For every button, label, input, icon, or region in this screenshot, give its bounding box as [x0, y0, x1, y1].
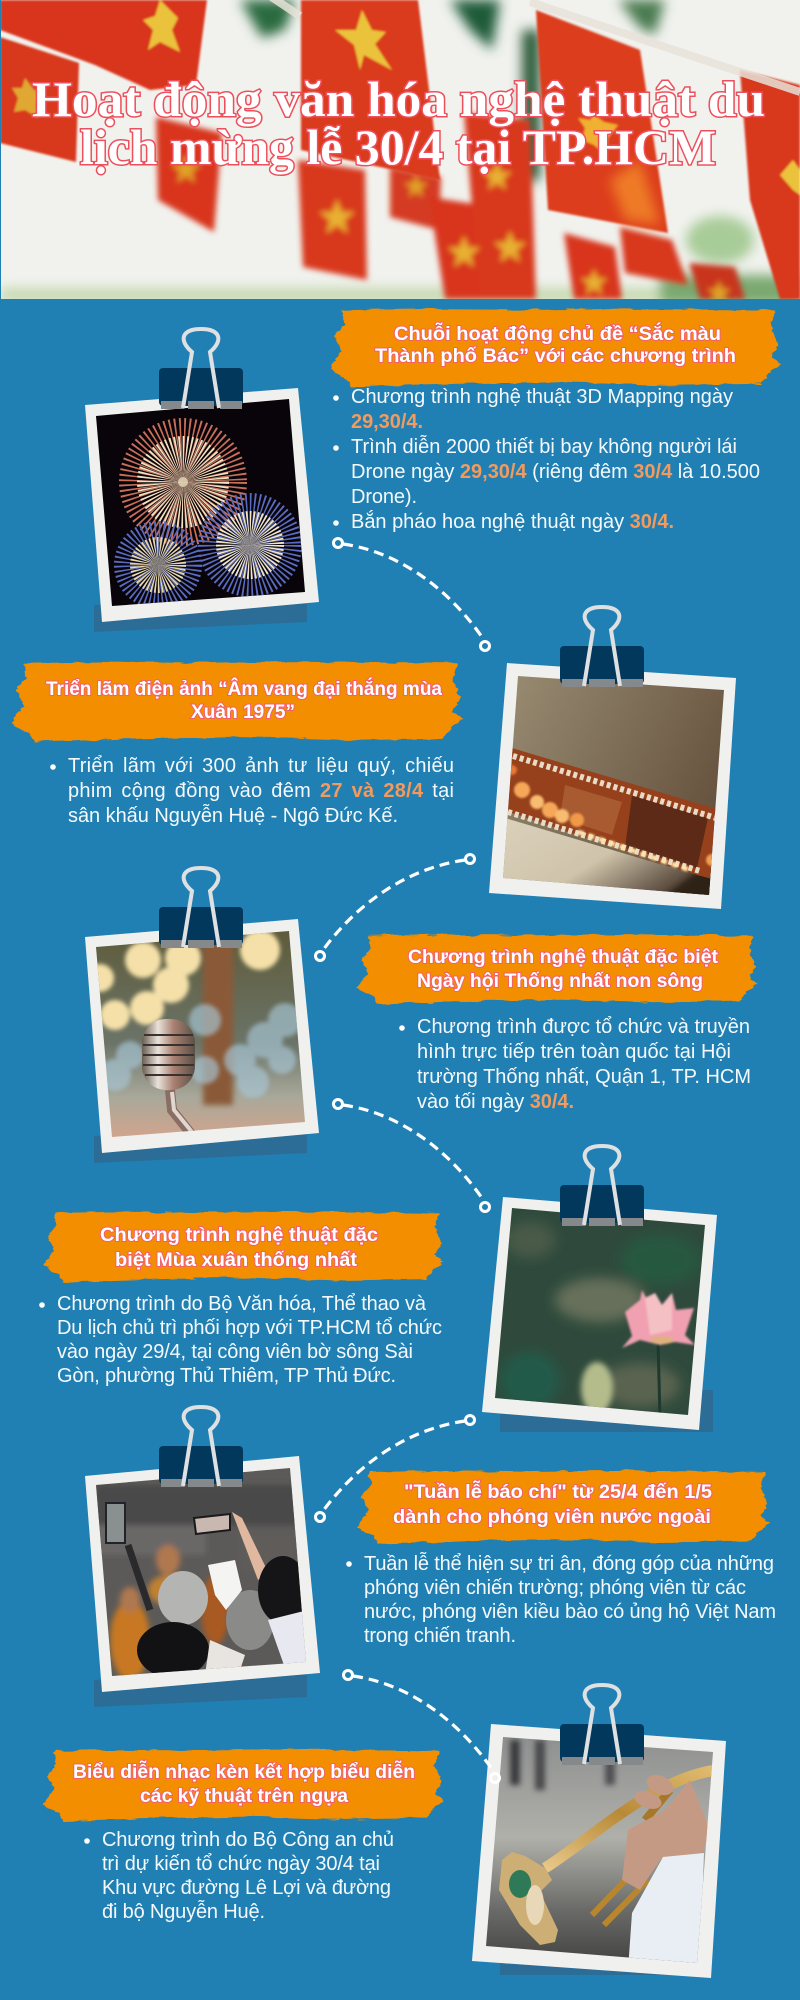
- section 3: Ngày hội Thống nhất non sông: [85, 868, 758, 1163]
- bullet text: vào ngày 29/4, tại công viên bờ sông Sài: [57, 1341, 413, 1363]
- bullet text: trường Thống nhất, Quận 1, TP. HCM: [417, 1066, 751, 1088]
- bullet text: vào tối ngày 30/4.: [417, 1091, 574, 1113]
- binder clip: [560, 1146, 644, 1226]
- dashed connector 5: [344, 1670, 500, 1782]
- banner heading: Ngày hội Thống nhất non sông: [417, 970, 703, 992]
- bullet list: [333, 386, 760, 533]
- dashed connector 4: [316, 1416, 474, 1522]
- bullet text: hình trực tiếp trên toàn quốc tại Hội: [417, 1041, 731, 1063]
- banner heading: [357, 1470, 770, 1544]
- banner heading: [43, 1211, 444, 1282]
- bullet list: Bắn pháo hoa nghệ thuật ngày 30/4.: [351, 510, 674, 533]
- polaroid photo: fireworks: [85, 388, 319, 632]
- banner heading: Triển lãm điện ảnh “Âm vang đại thắng mùa: [46, 676, 442, 700]
- banner heading: [43, 1749, 444, 1821]
- binder clip: [159, 868, 243, 948]
- bullet text: Gòn, phường Thủ Thiêm, TP Thủ Đức.: [57, 1365, 396, 1387]
- section 1: Sắc màu Thành phố Bác: [85, 309, 781, 632]
- banner heading: Biểu diễn nhạc kèn kết hợp biểu diễn: [73, 1759, 415, 1783]
- banner heading: Xuân 1975”: [191, 701, 295, 723]
- bullet text: Khu vực đường Lê Lợi và đường: [102, 1877, 391, 1899]
- banner heading: dành cho phóng viên nước ngoài: [393, 1506, 711, 1528]
- banner heading: các kỹ thuật trên ngựa: [140, 1785, 348, 1807]
- binder clip: [159, 329, 243, 409]
- bullet list: 29,30/4.: [351, 411, 423, 433]
- bullet text: Chương trình do Bộ Văn hóa, Thể thao và: [57, 1293, 427, 1315]
- bullet text: phóng viên chiến trường; phóng viên từ các: [364, 1577, 746, 1599]
- dashed connector 3: [334, 1100, 490, 1212]
- banner heading: "Tuần lễ báo chí" từ 25/4 đến 1/5: [404, 1479, 712, 1503]
- banner heading: Thành phố Bác” với các chương trình: [375, 345, 736, 367]
- polaroid photo: microphone: [85, 919, 319, 1163]
- banner heading: [11, 662, 463, 742]
- bullet text: phim cộng đồng vào đêm 27 và 28/4 tại: [68, 780, 454, 802]
- title: Hoạt động văn hóa nghệ thuật du: [32, 71, 765, 127]
- bullet text: Tuần lễ thể hiện sự tri ân, đóng góp của những: [364, 1552, 774, 1575]
- section 4: Mùa xuân thống nhất: [39, 1146, 717, 1432]
- binder clip: [560, 607, 644, 687]
- dashed connector 2: [316, 854, 474, 960]
- bullet text: đi bộ Nguyễn Huệ.: [102, 1900, 265, 1923]
- banner heading: [329, 309, 781, 387]
- banner heading: Chương trình nghệ thuật đặc: [100, 1224, 378, 1246]
- polaroid photo: lotus: [482, 1197, 717, 1432]
- bullet list: Trình diễn 2000 thiết bị bay không người lái: [351, 435, 737, 458]
- polaroid photo: film strip: [489, 663, 736, 909]
- bullet text: nước, phóng viên kiều bào có ủng hộ Việt Nam: [364, 1601, 776, 1623]
- dashed connector 1: [334, 538, 490, 650]
- binder clip: [560, 1685, 644, 1765]
- banner heading: Chương trình nghệ thuật đặc biệt: [408, 946, 719, 968]
- bullet text: Du lịch chủ trì phối hợp với TP.HCM tổ chức: [57, 1317, 442, 1339]
- bullet text: [39, 1293, 442, 1387]
- section 2: Triển lãm điện ảnh: [11, 607, 736, 909]
- bullet list: Drone ngày 29,30/4 (riêng đêm 30/4 là 10.500: [351, 461, 760, 483]
- banner heading: Chuỗi hoạt động chủ đề “Sắc màu: [394, 321, 721, 345]
- bullet text: [84, 1829, 394, 1923]
- section 5: Tuần lễ báo chí: [85, 1407, 776, 1707]
- banner heading: biệt Mùa xuân thống nhất: [115, 1249, 358, 1271]
- bullet text: [399, 1016, 751, 1113]
- title: [32, 71, 765, 175]
- hero photo: Vietnamese flag bunting: [0, 0, 800, 305]
- bullet list: Chương trình nghệ thuật 3D Mapping ngày: [351, 386, 733, 408]
- bunting strings: [270, 0, 800, 92]
- title: lịch mừng lễ 30/4 tại TP.HCM: [80, 119, 716, 175]
- bullet text: [50, 755, 454, 827]
- bullet text: Chương trình được tổ chức và truyền: [417, 1016, 750, 1038]
- bullet text: sân khấu Nguyễn Huệ - Ngô Đức Kế.: [68, 804, 398, 827]
- bullet text: Triển lãm với 300 ảnh tư liệu quý, chiếu: [68, 755, 454, 777]
- bullet text: Chương trình do Bộ Công an chủ: [102, 1829, 394, 1851]
- bullet text: trì dự kiến tổ chức ngày 30/4 tại: [102, 1853, 380, 1875]
- binder clip: [159, 1407, 243, 1487]
- banner heading: [357, 934, 758, 1004]
- bullet text: trong chiến tranh.: [364, 1625, 516, 1647]
- section 6: Biểu diễn nhạc kèn: [43, 1685, 726, 1978]
- polaroid photo: press crowd: [85, 1456, 320, 1707]
- bullet list: Drone).: [351, 486, 417, 508]
- polaroid photo: trumpet: [472, 1724, 726, 1978]
- bullet text: [346, 1552, 776, 1647]
